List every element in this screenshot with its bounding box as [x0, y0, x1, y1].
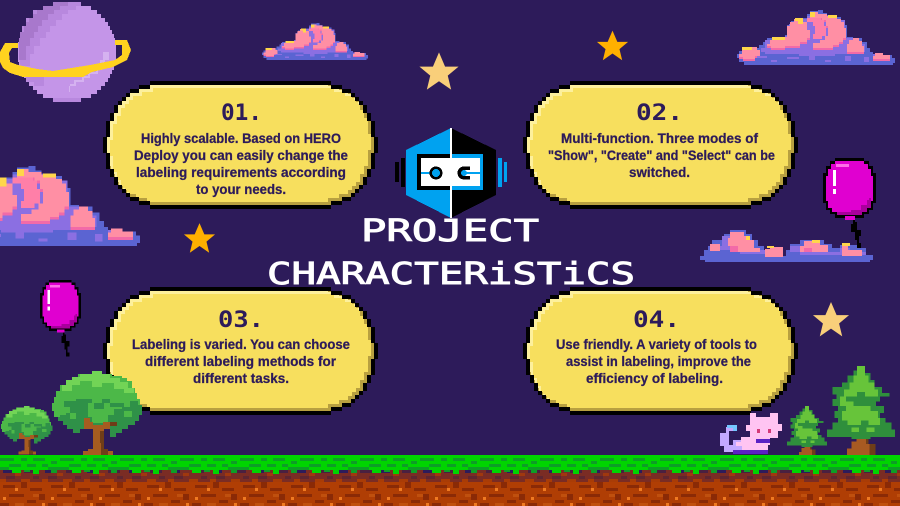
text: 02 description: "Show", "Create" and "Select" can be: [548, 148, 775, 163]
number 01: 01.: [221, 101, 262, 126]
text: 04 description: Use friendly. A variety of tools to: [556, 337, 757, 352]
text: 02 description: Multi-function. Three modes of: [561, 131, 758, 146]
panel: 02: [523, 81, 798, 209]
ground: grass and dirt: [0, 455, 900, 506]
panel: 01: [103, 81, 378, 209]
tree: small oak: [1, 406, 52, 454]
text: 04 description: [556, 337, 757, 386]
tree: small pine: [787, 406, 827, 456]
title: CHARACTERiSTiCS: [267, 257, 635, 292]
text: 03 description: [132, 337, 350, 386]
text: 01 description: to your needs.: [196, 182, 286, 197]
text: 01 description: Deploy you can easily change the: [134, 148, 348, 163]
star: pale centre: [419, 52, 459, 90]
cloud: top right: [737, 10, 895, 65]
star: orange top: [597, 31, 628, 60]
number 04: 04.: [633, 308, 680, 333]
text: 04 description: efficiency of labeling.: [586, 371, 723, 386]
text: 02 description: [548, 131, 775, 180]
panel: 04: [523, 287, 798, 415]
star: orange left: [184, 223, 215, 253]
cloud: right middle: [700, 230, 873, 262]
text: 01 description: Highly scalable. Based on HERO: [141, 131, 341, 146]
star: pale right: [813, 302, 849, 336]
text: 03 description: different labeling methods for: [145, 354, 337, 369]
cloud: left edge: [0, 166, 140, 246]
text: 02 description: switched.: [629, 165, 690, 180]
planet ring: [0, 40, 131, 77]
text: 03 description: Labeling is varied. You can choose: [132, 337, 350, 352]
title: [267, 214, 635, 292]
cloud: top centre: [262, 23, 368, 60]
text: 01 description: labeling requirements according: [136, 165, 346, 180]
title: PROJECT: [361, 214, 539, 249]
text: 03 description: different tasks.: [193, 371, 289, 386]
number 02: 02.: [636, 101, 683, 126]
icon: robot logo: [395, 128, 507, 218]
icon: ringed purple planet: [0, 2, 131, 102]
balloon: left: [40, 280, 81, 356]
text: 04 description: assist in labeling, improve the: [566, 354, 751, 369]
panel: 03: [103, 287, 378, 415]
text: 01 description: [134, 131, 348, 197]
tree: large oak: [52, 371, 142, 456]
number 03: 03.: [218, 308, 264, 333]
tree: large pine: [827, 366, 895, 456]
balloon: right: [823, 158, 876, 248]
icon: pixel cat: [720, 413, 782, 454]
